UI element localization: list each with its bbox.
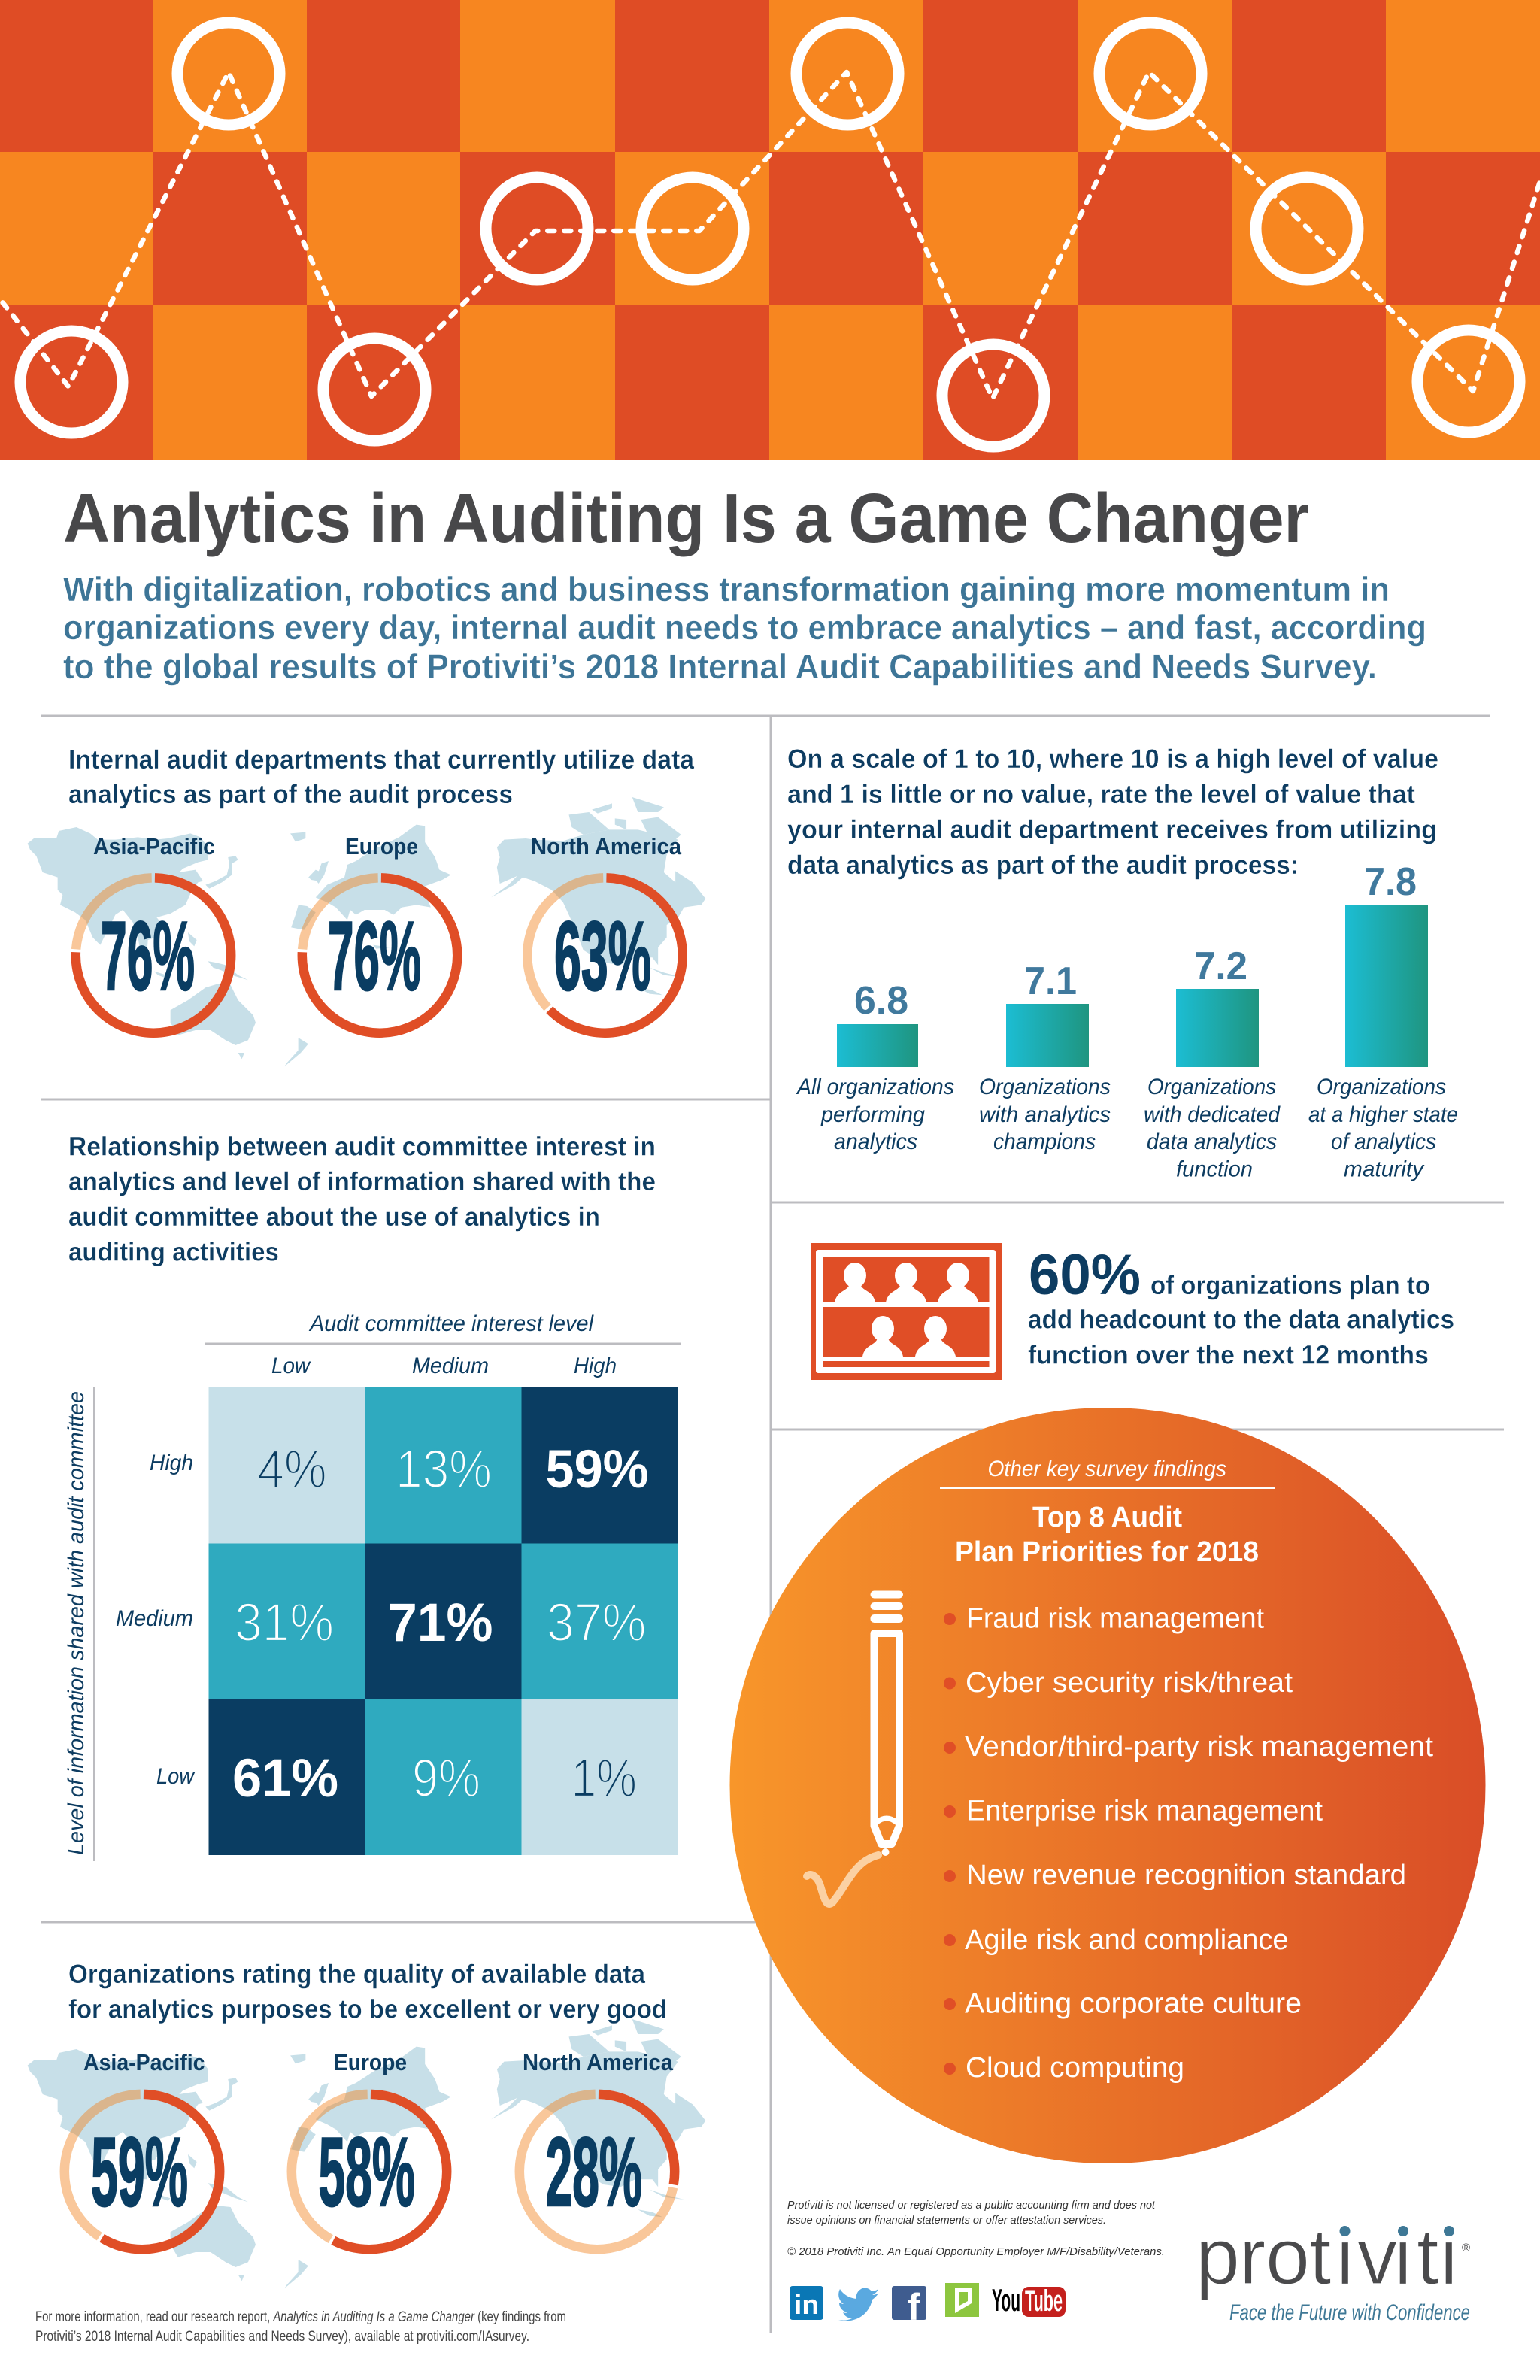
legal disclaimer: Protiviti is not licensed or registered as a public accounting firm and does not [787, 2199, 1156, 2212]
icon: Protiviti D [945, 2283, 979, 2317]
subtitle [63, 570, 1426, 686]
footnote: more information: For more information, read our research report, Analytics in Auditing Is a Game Changer (key findings from [35, 2309, 566, 2325]
heading: relationship: Relationship between audit committee interest in [68, 1132, 656, 1161]
heat map cells: 71% [388, 1593, 493, 1653]
label: other key survey findings: Other key survey findings [988, 1457, 1226, 1481]
bar: higher maturity 7.8 [1308, 860, 1458, 1182]
panel: top 8 audit plan priorities circle [729, 1408, 1486, 2163]
list: priorities [944, 1603, 1433, 2084]
bar: all organizations 6.8: 6.8 [854, 979, 908, 1023]
world map backdrop [28, 2019, 705, 2288]
heading: top 8: Top 8 Audit [1032, 1502, 1182, 1533]
heading: value rating: On a scale of 1 to 10, where 10 is a high level of value [787, 744, 1438, 774]
bar: all organizations 6.8: performing [820, 1102, 925, 1127]
icon: people [811, 1243, 1002, 1380]
logo: protiviti: protiviti [1196, 2212, 1458, 2301]
region: Asia-Pacific 76%: 76% [101, 901, 195, 1011]
text: 60% of organizations: add headcount to the data analytics [1028, 1305, 1454, 1334]
heading: relationship: audit committee about the use of analytics in [68, 1202, 600, 1232]
heading: value rating: your internal audit department receives from utilizing [787, 815, 1437, 844]
heat map cells: 59% [546, 1440, 648, 1499]
bar: analytics champions 7.1: with analytics [979, 1102, 1111, 1127]
bar: higher maturity 7.8: 7.8 [1364, 860, 1417, 904]
bar: analytics champions 7.1: Organizations [979, 1075, 1111, 1099]
list: priorities: Cloud computing [966, 2052, 1184, 2084]
region: Europe 76%: Europe [345, 833, 418, 860]
legal disclaimer [787, 2199, 1165, 2258]
bar: all organizations 6.8: analytics [834, 1129, 917, 1154]
world map backdrop [28, 797, 705, 1066]
list: priorities: Vendor/third-party risk management [965, 1731, 1433, 1763]
region: Asia-Pacific 59% [65, 2049, 220, 2249]
bar: dedicated function 7.2: 7.2 [1194, 944, 1247, 988]
list: priorities: Cyber security risk/threat [966, 1667, 1293, 1699]
bar: all organizations 6.8: All organizations [796, 1075, 954, 1099]
row axis labels: Level of information shared with audit committee [64, 1391, 89, 1855]
section dividers [41, 716, 1504, 2333]
row axis labels [64, 1387, 196, 1861]
icon: pencil and check mark [807, 1591, 903, 1904]
bar: dedicated function 7.2: with dedicated [1144, 1102, 1281, 1127]
region: North America 28%: North America [523, 2049, 674, 2075]
heading: relationship: auditing activities [68, 1238, 279, 1266]
heading: current use [68, 745, 695, 809]
heading: value rating: and 1 is little or no value, rate the level of value that [787, 780, 1415, 809]
icon: LinkedIn [790, 2286, 823, 2320]
region: North America 63% [527, 833, 683, 1033]
text: 60% of organizations [1028, 1243, 1454, 1370]
logo: protiviti: ® [1462, 2242, 1470, 2254]
region: North America 63%: 63% [554, 901, 651, 1011]
heading: current use: Internal audit departments that currently utilize data [68, 745, 695, 775]
heading: top 8: Plan Priorities for 2018 [955, 1536, 1259, 1568]
panel: 60% headcount callout [811, 1243, 1454, 1380]
bar: analytics champions 7.1: 7.1 [1024, 960, 1077, 1003]
bar: dedicated function 7.2: function [1176, 1157, 1253, 1182]
icon: LinkedIn: in [794, 2289, 819, 2320]
region: Asia-Pacific 59%: Asia-Pacific [83, 2049, 205, 2075]
heading: data quality: Organizations rating the quality of available data [68, 1960, 646, 1989]
region: Europe 76% [302, 833, 457, 1033]
bar: higher maturity 7.8: of analytics [1331, 1129, 1436, 1154]
region: Asia-Pacific 59%: 59% [91, 2117, 188, 2227]
heat map cells [209, 1387, 678, 1855]
panel: audit committee heat map [64, 1132, 681, 1861]
footnote: more information [35, 2309, 566, 2345]
title: Analytics in Auditing Is a Game Changer [63, 479, 1309, 557]
bar: higher maturity 7.8: Organizations [1317, 1075, 1446, 1099]
region: Asia-Pacific 76% [76, 833, 231, 1033]
social icons [790, 2282, 1066, 2328]
list: priorities: Agile risk and compliance [965, 1924, 1289, 1956]
heading: value rating [787, 744, 1438, 880]
bar: analytics champions 7.1 [979, 960, 1111, 1154]
bar: higher maturity 7.8: at a higher state [1308, 1102, 1458, 1127]
icon: Facebook: f [908, 2286, 920, 2328]
column axis labels: High [574, 1354, 617, 1378]
region: North America 63%: North America [531, 833, 682, 860]
legal disclaimer: issue opinions on financial statements or offer attestation services. [787, 2214, 1106, 2227]
heading: data quality: for analytics purposes to be excellent or very good [68, 1994, 667, 2024]
icon: YouTube: Tube [1025, 2284, 1063, 2318]
bar: all organizations 6.8 [796, 979, 954, 1154]
heat map cells: 31% [235, 1593, 334, 1653]
row axis labels: Medium [116, 1606, 193, 1631]
column axis labels [205, 1311, 681, 1378]
column axis labels: Low [271, 1354, 311, 1378]
bar: analytics champions 7.1: champions [993, 1129, 1096, 1154]
heat map cells: 61% [232, 1749, 338, 1808]
region: Europe 58%: Europe [334, 2049, 407, 2075]
row axis labels: High [150, 1451, 193, 1475]
heading: value rating: data analytics as part of the audit process: [787, 850, 1299, 880]
header banner: checkerboard with line chart [0, 0, 1540, 460]
region: Europe 58% [292, 2049, 447, 2249]
heading: relationship: analytics and level of information shared with the [68, 1167, 656, 1196]
heading: relationship [68, 1132, 656, 1266]
heat map cells: 13% [396, 1440, 492, 1499]
icon: Facebook [892, 2286, 926, 2328]
region: North America 28%: 28% [546, 2117, 642, 2227]
list: priorities: Auditing corporate culture [965, 1988, 1302, 2020]
footnote: more information: Protiviti’s 2018 Internal Audit Capabilities and Needs Survey), available at protiviti.com/IAsurvey. [35, 2329, 529, 2345]
heading: data quality [68, 1960, 667, 2024]
legal disclaimer: © 2018 Protiviti Inc. An Equal Opportunity Employer M/F/Disability/Veterans. [787, 2245, 1165, 2258]
heat map cells: 4% [257, 1440, 326, 1499]
heat map cells: 9% [412, 1749, 480, 1808]
bar: dedicated function 7.2: data analytics [1147, 1129, 1277, 1154]
bar: dedicated function 7.2 [1144, 944, 1281, 1182]
text: 60% of organizations: 60% [1029, 1243, 1141, 1307]
icon: YouTube: You [992, 2282, 1020, 2318]
heading: current use: analytics as part of the audit process [68, 780, 513, 809]
list: priorities: Enterprise risk management [966, 1796, 1323, 1827]
row axis labels: Low [156, 1764, 196, 1789]
subtitle: With digitalization, robotics and business transformation gaining more momentum in [63, 570, 1390, 608]
icon: Twitter [838, 2288, 878, 2321]
region: Asia-Pacific 76%: Asia-Pacific [93, 833, 215, 860]
region: Europe 76%: 76% [328, 901, 421, 1011]
panel: current use of data analytics [28, 745, 705, 1066]
region: Europe 58%: 58% [319, 2117, 415, 2227]
list: priorities: New revenue recognition standard [966, 1860, 1406, 1891]
region: North America 28% [520, 2049, 675, 2249]
column axis labels: Medium [412, 1354, 489, 1378]
column axis labels: Audit committee interest level [308, 1311, 594, 1336]
text: 60% of organizations: function over the next 12 months [1028, 1340, 1429, 1370]
text: 60% of organizations: of organizations plan to [1150, 1271, 1430, 1300]
bar: dedicated function 7.2: Organizations [1147, 1075, 1276, 1099]
panel: value rating bar chart [787, 744, 1458, 1182]
heat map cells: 37% [547, 1593, 647, 1653]
subtitle: to the global results of Protiviti’s 2018 Internal Audit Capabilities and Needs Survey. [63, 647, 1377, 686]
bar: higher maturity 7.8: maturity [1344, 1157, 1425, 1182]
heat map cells: 1% [571, 1749, 637, 1808]
list: priorities: Fraud risk management [966, 1603, 1264, 1635]
heading: top 8 [955, 1502, 1259, 1568]
subtitle: organizations every day, internal audit needs to embrace analytics – and fast, according [63, 608, 1426, 647]
panel: data quality ratings [28, 1960, 705, 2288]
